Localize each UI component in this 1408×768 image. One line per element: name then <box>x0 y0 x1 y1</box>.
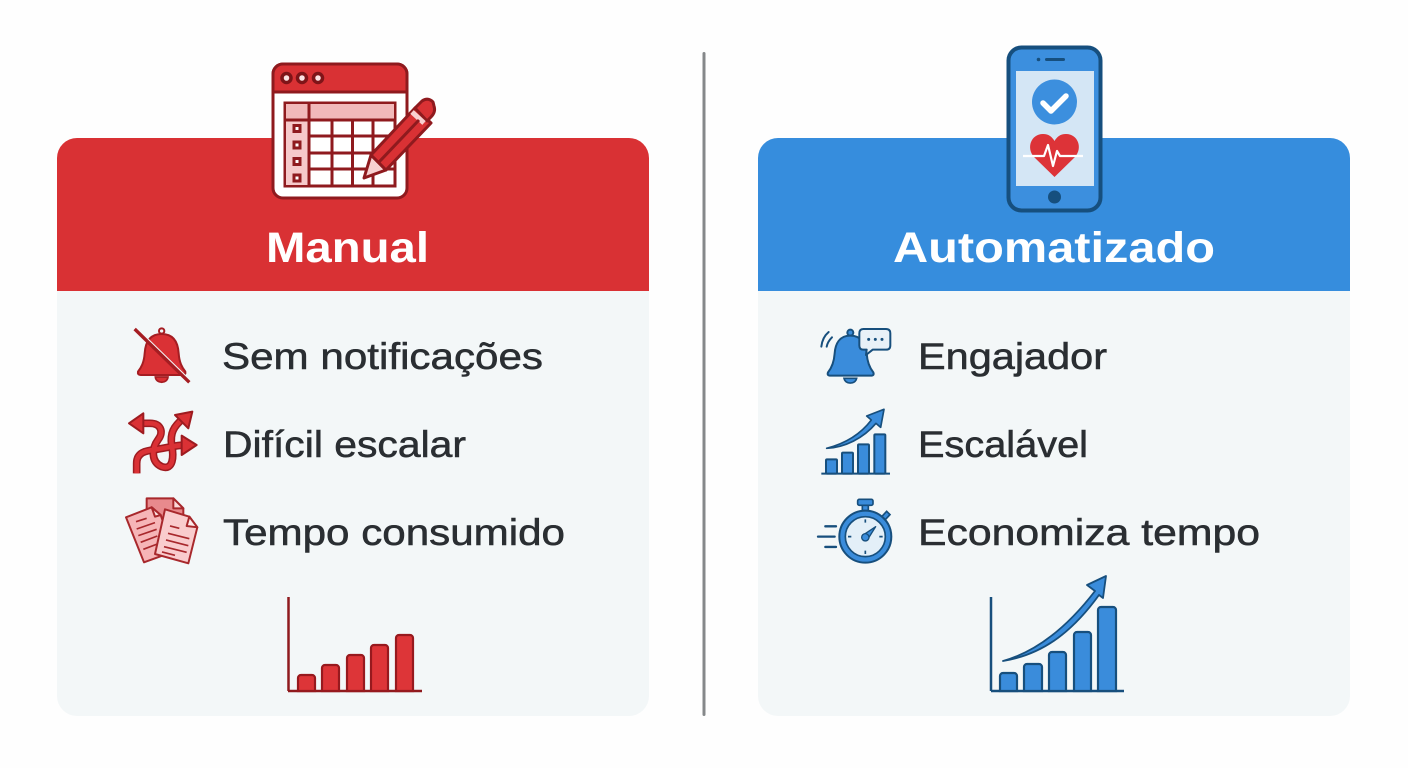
icon: calendar spreadsheet with pencil <box>273 64 435 198</box>
panel: manual: Tempo consumido <box>223 512 565 553</box>
heading: Automatizado: Automatizado <box>893 224 1215 272</box>
panel: manual: Sem notificações <box>222 336 543 377</box>
icon: tangled arrows <box>129 412 197 473</box>
panel: manual <box>57 64 649 716</box>
manual header band <box>57 138 649 291</box>
icon: stopwatch <box>818 499 891 563</box>
icon: paper stack <box>126 498 197 563</box>
icon: bell with speech bubble <box>821 329 890 383</box>
divider <box>702 52 706 716</box>
icon: muted bell <box>135 328 191 382</box>
panel: automatizado <box>758 48 1350 716</box>
chart: manual bars <box>288 597 422 691</box>
panel: manual: Difícil escalar <box>223 424 466 465</box>
icon: growth bars with arrow <box>821 409 890 474</box>
chart: automatizado bars with arrow <box>991 576 1124 691</box>
automatizado header band <box>758 138 1350 291</box>
panel: automatizado: Escalável <box>918 424 1088 465</box>
icon: smartphone with check and heart <box>1008 48 1100 210</box>
pencil <box>364 99 435 178</box>
heading: Manual: Manual <box>266 224 429 272</box>
panel: automatizado: Economiza tempo <box>918 512 1260 553</box>
panel: automatizado: Engajador <box>918 336 1107 377</box>
